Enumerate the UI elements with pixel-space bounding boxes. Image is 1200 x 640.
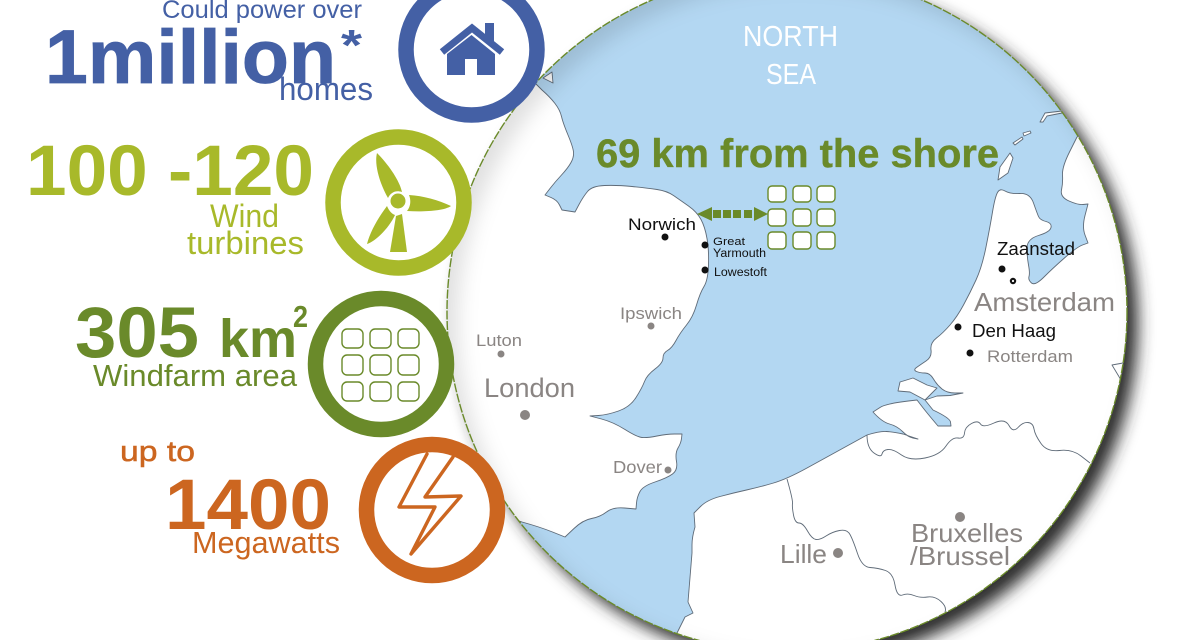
panel: turbines stat (26, 132, 464, 268)
text: megawatts: Megawatts (192, 525, 340, 560)
text: asterisk: * (341, 21, 363, 70)
panel: megawatts stat (120, 436, 498, 576)
land: delta island (898, 378, 937, 400)
map labels: grey cities: Luton (476, 331, 522, 350)
text: 1400: 1400 (165, 466, 331, 545)
heading: north sea (743, 21, 838, 91)
map labels: black cities: Norwich (628, 215, 696, 234)
arrow: distance to shore (697, 207, 768, 221)
text: up to: up to (120, 436, 195, 468)
heading: north sea: SEA (766, 59, 817, 91)
map labels: grey cities: Rotterdam (987, 347, 1073, 366)
icon: grid in ring (316, 298, 446, 430)
border: france and belgium (787, 479, 946, 612)
map labels: black cities: Lowestoft (714, 267, 768, 279)
heading: distance from shore: 69 km from the shore (596, 132, 999, 176)
map labels: black cities: Great (713, 236, 745, 248)
text: turbines: turbines (187, 225, 304, 261)
icon: wind farm grid on map (768, 186, 835, 249)
land: vlieland island (1013, 137, 1023, 145)
land: small wadden island (1023, 131, 1031, 136)
panel: circular map (446, 0, 1128, 640)
map labels: black cities: Yarmouth (713, 248, 766, 260)
text: 100-120: 100 -120 (26, 132, 314, 211)
map labels: grey cities (476, 287, 1115, 571)
map labels: black cities: Zaanstad (997, 239, 1075, 259)
map labels: black cities (628, 215, 1075, 356)
map labels: grey cities: Dover (613, 457, 662, 477)
panel: homes stat (45, 0, 537, 115)
land: small headland island (543, 72, 553, 83)
map labels: grey cities: Amsterdam (974, 287, 1115, 317)
icon: wind turbine in ring (333, 137, 464, 268)
map outline (447, 0, 1127, 640)
land: england (447, 84, 710, 538)
text: 1 million: 1million (45, 15, 336, 100)
inner shadow (447, 0, 1102, 624)
map labels: grey cities: /Brussel (910, 541, 1010, 571)
map labels: grey cities: Bruxelles (911, 518, 1023, 548)
land: continental europe (676, 136, 1127, 640)
map drop shadow (458, 0, 1138, 640)
icon: lightning bolt in ring (366, 444, 498, 576)
text: homes: homes (279, 71, 373, 107)
text: windfarm area: Windfarm area (93, 358, 298, 393)
land: texel island (998, 153, 1013, 180)
border: belgium and netherlands (867, 421, 1090, 463)
icon: house in ring (406, 0, 537, 115)
border: netherlands and germany (1112, 363, 1123, 380)
north sea water (447, 0, 1127, 640)
map land and borders (447, 72, 1127, 640)
map labels: grey cities: Ipswich (620, 304, 682, 323)
map labels: grey cities: Lille (780, 539, 827, 569)
heading: north sea: NORTH (743, 21, 838, 53)
map labels: grey cities: London (484, 373, 575, 403)
text: squared: 2 (293, 299, 308, 334)
panel: area stat (75, 294, 446, 430)
text: km: km (219, 309, 297, 369)
text: 305: 305 (75, 294, 199, 373)
land: terschelling island (1040, 111, 1062, 122)
map labels: black cities: Den Haag (972, 321, 1056, 341)
text: wind: Wind (210, 198, 279, 234)
